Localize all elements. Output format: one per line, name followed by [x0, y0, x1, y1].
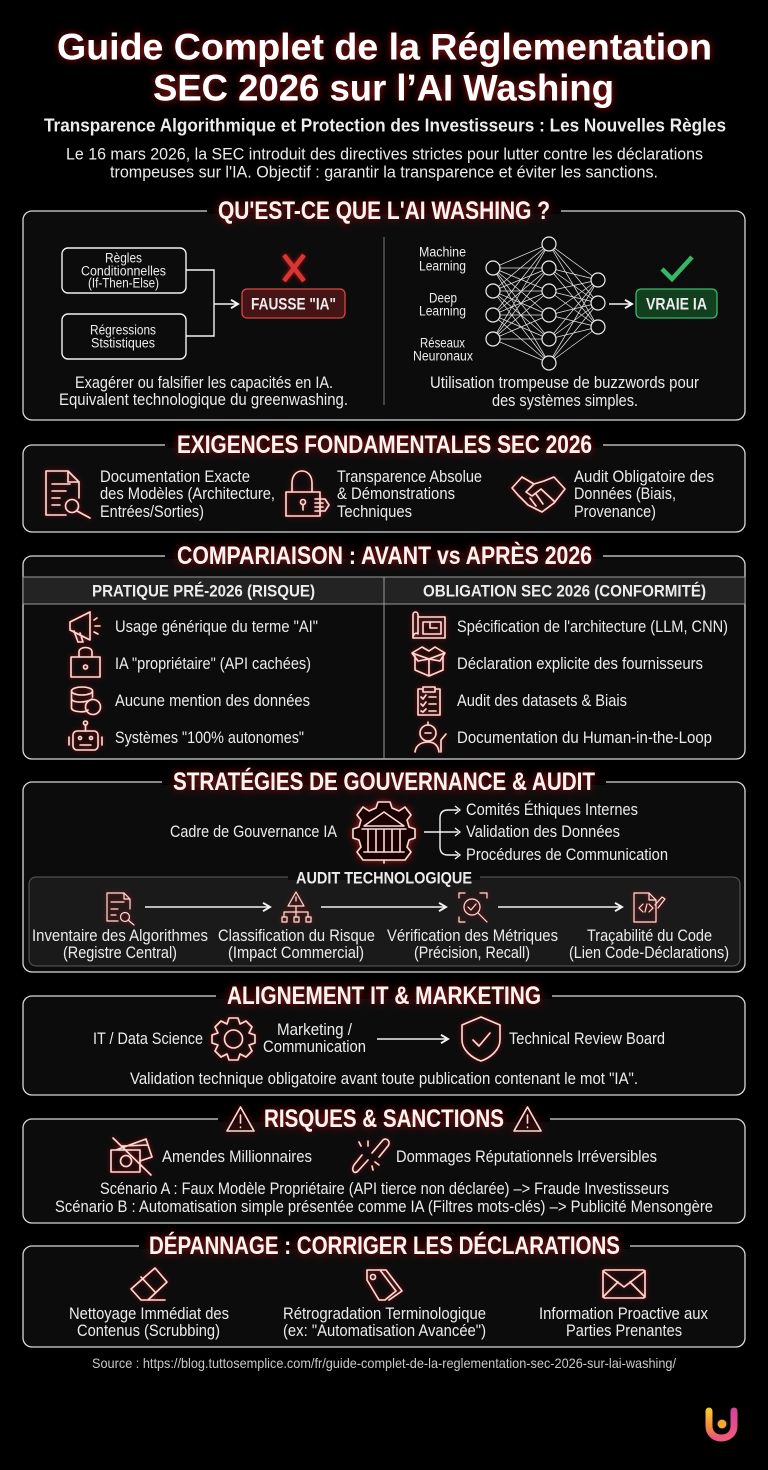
heading: STRATÉGIES DE GOUVERNANCE & AUDIT	[173, 767, 595, 796]
row right: architecture: Spécification de l'architecture (LLM, CNN)	[457, 618, 728, 636]
icon: code	[634, 893, 665, 922]
diagram: neural network	[486, 237, 605, 370]
text: nettoyage	[69, 1305, 229, 1340]
text: définition droite: des systèmes simples.	[492, 392, 638, 410]
text: documentation: des Modèles (Architecture,	[100, 485, 275, 503]
panel: gouvernance et audit	[23, 767, 745, 972]
badge: fausse IA: FAUSSE "IA"	[251, 294, 336, 314]
box: règles conditionnelles	[62, 248, 186, 293]
labels: types d'IA: Neuronaux	[413, 348, 473, 364]
panel: comparaison	[23, 541, 745, 759]
text: validation: Validation technique obligatoire avant toute publication contenant le mot "IA".	[130, 1070, 638, 1088]
text: scénarios: Scénario B : Automatisation simple présentée comme IA (Filtres mots-clés) –> Publicité Mensongère	[55, 1198, 713, 1216]
row left: proprietaire: IA "propriétaire" (API cachées)	[115, 655, 311, 673]
subtitle: Transparence Algorithmique et Protection des Investisseurs : Les Nouvelles Règles	[44, 114, 726, 136]
text: nettoyage: Contenus (Scrubbing)	[77, 1322, 220, 1340]
text: audit: Audit Obligatoire des	[574, 468, 714, 486]
text: IT: IT / Data Science	[93, 1030, 203, 1048]
text: information	[539, 1305, 709, 1340]
text: documentation: Entrées/Sorties)	[100, 503, 204, 521]
text: audit: Données (Biais,	[574, 485, 676, 503]
text: définition droite	[430, 374, 699, 410]
panel: qu'est-ce que l'AI washing	[23, 197, 745, 420]
labels: types d'IA: Deep	[429, 290, 457, 306]
text: review board: Technical Review Board	[509, 1030, 665, 1048]
list: gouvernance: Procédures de Communication	[466, 846, 668, 864]
text: amendes: Amendes Millionnaires	[162, 1148, 312, 1166]
row right: fournisseurs	[412, 647, 703, 676]
text: rétrogradation: (ex: "Automatisation Avancée")	[283, 1322, 486, 1340]
text: transparence	[337, 468, 482, 521]
icon: engrenage	[212, 1018, 255, 1060]
text: scénarios: Scénario A : Faux Modèle Propriétaire (API tierce non déclarée) –> Fraude Investisseurs	[100, 1180, 669, 1198]
text: documentation: Documentation Exacte	[100, 468, 250, 486]
text: étapes: (Lien Code-Déclarations)	[569, 944, 729, 962]
icon: cadenas	[286, 471, 329, 516]
panel: dépannage	[23, 1231, 745, 1347]
text: cadre: Cadre de Gouvernance IA	[170, 823, 337, 841]
heading: COMPARIAISON : AVANT vs APRÈS 2026	[177, 541, 592, 570]
text: étapes: Traçabilité du Code	[587, 927, 712, 945]
list: gouvernance	[466, 800, 668, 864]
text: audit	[574, 468, 714, 521]
title: Guide Complet de la Réglementation	[57, 26, 712, 68]
heading: QU'EST-CE QUE L'AI WASHING ?	[218, 197, 550, 225]
row left: usage	[70, 612, 318, 642]
icon: green check	[662, 257, 692, 279]
text: définition gauche	[59, 374, 348, 409]
arrow	[498, 906, 622, 908]
text: marketing: Communication	[263, 1038, 366, 1056]
arrow	[321, 906, 446, 908]
box: règles conditionnelles: Conditionnelles	[81, 264, 166, 278]
icon: poignée de main	[512, 477, 565, 512]
row right: datasets: Audit des datasets & Biais	[457, 692, 627, 710]
intro text	[66, 144, 703, 182]
text: marketing	[263, 1021, 366, 1056]
icon: gouvernance	[353, 802, 415, 863]
icon: bouclier	[462, 1017, 500, 1061]
text: nettoyage: Nettoyage Immédiat des	[69, 1305, 229, 1323]
row right: datasets	[418, 687, 627, 715]
row right: human in the loop	[415, 722, 712, 752]
icon: warning left	[227, 1107, 254, 1131]
arrow: vers fausse IA	[186, 270, 238, 336]
text: documentation	[100, 468, 275, 521]
box: régressions statistiques	[62, 314, 186, 359]
arrow: vers vraie IA	[609, 303, 632, 305]
text: étapes: Vérification des Métriques	[387, 927, 558, 945]
text: étapes: (Impact Commercial)	[228, 944, 364, 962]
text: définition gauche: Exagérer ou falsifier les capacités en IA.	[75, 374, 333, 392]
icon: warning right	[514, 1107, 541, 1131]
panel: risques et sanctions	[23, 1105, 745, 1223]
text: transparence: Transparence Absolue	[337, 468, 482, 486]
panel: alignement IT et marketing	[23, 982, 745, 1095]
text: transparence: Techniques	[337, 503, 412, 521]
title	[57, 26, 712, 108]
icon: étiquette	[367, 1270, 402, 1300]
text: dommages: Dommages Réputationnels Irréversibles	[396, 1148, 657, 1166]
arrows: fork	[424, 806, 460, 859]
text: information: Parties Prenantes	[566, 1322, 682, 1340]
table header: PRATIQUE PRÉ-2026 (RISQUE)	[92, 582, 315, 600]
arrow	[145, 906, 270, 908]
subpanel: audit technologique	[29, 868, 740, 966]
text: audit: Provenance)	[574, 503, 656, 521]
heading: DÉPANNAGE : CORRIGER LES DÉCLARATIONS	[149, 1231, 620, 1260]
icon: red cross	[284, 255, 304, 281]
icon: risque	[282, 892, 311, 922]
box: régressions statistiques: Régressions	[90, 322, 156, 338]
text: marketing: Marketing /	[277, 1021, 352, 1039]
icon: document loupe	[46, 471, 90, 518]
text: scénarios	[55, 1180, 713, 1216]
list: gouvernance: Validation des Données	[466, 823, 620, 841]
row right: architecture	[413, 612, 728, 638]
table header	[23, 577, 745, 604]
text: définition droite: Utilisation trompeuse de buzzwords pour	[430, 374, 699, 392]
labels: types d'IA	[413, 244, 473, 364]
text: étapes: Classification du Risque	[218, 927, 375, 945]
intro text: trompeuses sur l'IA. Objectif : garantir la transparence et éviter les sanctions.	[110, 162, 658, 182]
arrow	[377, 1038, 448, 1040]
labels: types d'IA: Machine	[419, 244, 466, 260]
row left: robot	[69, 721, 304, 750]
text: étapes: (Registre Central)	[63, 944, 177, 962]
icon: inventaire	[107, 893, 134, 925]
box: règles conditionnelles: Règles	[105, 250, 142, 266]
text: étapes: Inventaire des Algorithmes	[32, 927, 208, 945]
box: règles conditionnelles: (If-Then-Else)	[88, 276, 159, 290]
heading: ALIGNEMENT IT & MARKETING	[227, 982, 541, 1010]
icon: gomme	[131, 1268, 167, 1300]
text: rétrogradation	[283, 1305, 486, 1340]
icon: amendes	[111, 1138, 152, 1175]
panel: exigences fondamentales	[23, 431, 745, 532]
row left: proprietaire	[71, 648, 311, 677]
labels: types d'IA: Learning	[419, 304, 466, 318]
table header: OBLIGATION SEC 2026 (CONFORMITÉ)	[423, 582, 706, 600]
text: information: Information Proactive aux	[539, 1305, 709, 1323]
text: étapes	[32, 927, 729, 962]
source: Source : https://blog.tuttosemplice.com/fr/guide-complet-de-la-reglementation-sec-2026-sur-lai-washing/	[92, 1355, 676, 1371]
row left: données	[72, 687, 310, 714]
row left: robot: Systèmes "100% autonomes"	[115, 729, 304, 747]
heading: EXIGENCES FONDAMENTALES SEC 2026	[177, 431, 592, 459]
labels: types d'IA: Learning	[419, 258, 466, 274]
row right: human in the loop: Documentation du Human-in-the-Loop	[457, 729, 712, 747]
badge: fausse IA	[242, 289, 345, 318]
list: gouvernance: Comités Éthiques Internes	[466, 800, 638, 819]
badge: vraie IA: VRAIE IA	[646, 294, 707, 314]
subheading: AUDIT TECHNOLOGIQUE	[296, 868, 472, 888]
icon: métriques	[459, 893, 487, 922]
text: définition gauche: Equivalent technologique du greenwashing.	[59, 391, 348, 409]
heading: RISQUES & SANCTIONS	[264, 1105, 504, 1133]
text: rétrogradation: Rétrogradation Terminologique	[283, 1305, 486, 1323]
badge: vraie IA	[636, 289, 717, 318]
text: transparence: & Démonstrations	[337, 485, 455, 503]
row left: usage: Usage générique du terme "AI"	[115, 618, 318, 636]
intro text: Le 16 mars 2026, la SEC introduit des directives strictes pour lutter contre les déclarations	[66, 144, 703, 164]
box: régressions statistiques: Ststistiques	[91, 336, 155, 350]
row left: données: Aucune mention des données	[115, 692, 310, 710]
title: SEC 2026 sur l’AI Washing	[153, 68, 614, 108]
labels: types d'IA: Réseaux	[420, 336, 465, 350]
icon: enveloppe	[603, 1270, 645, 1298]
logo	[709, 1411, 734, 1438]
text: étapes: (Précision, Recall)	[414, 944, 530, 962]
row right: fournisseurs: Déclaration explicite des fournisseurs	[457, 655, 703, 673]
icon: chaîne brisée	[353, 1139, 389, 1172]
